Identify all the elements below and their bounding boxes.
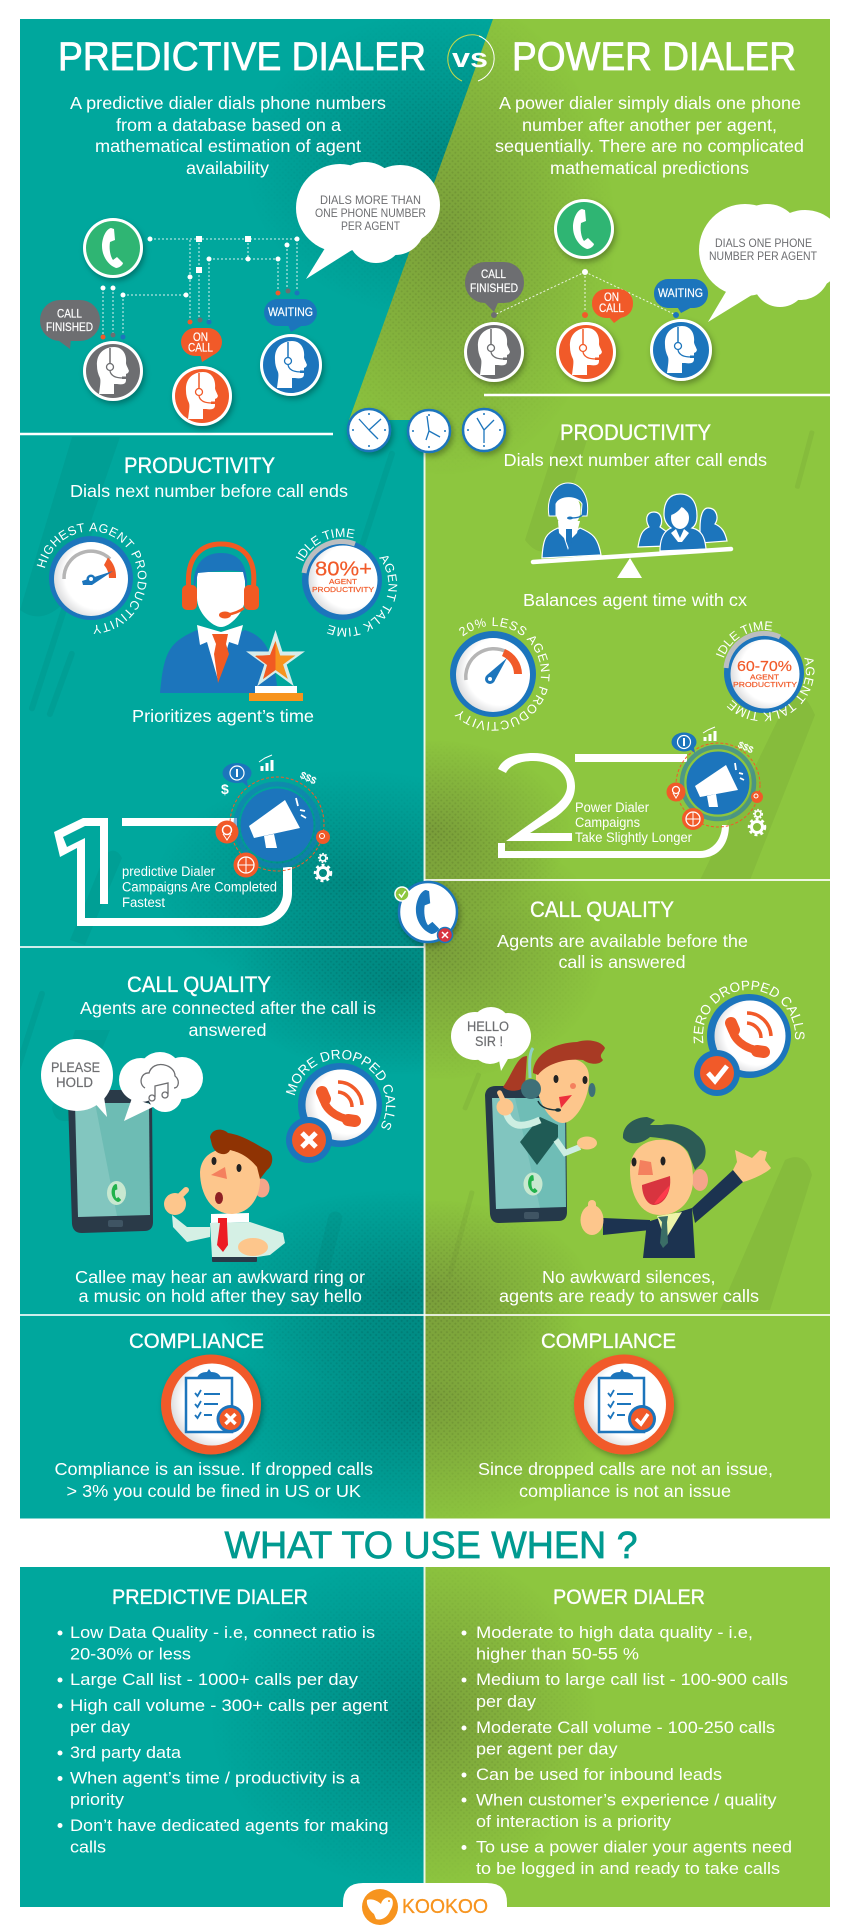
background: teal and green comparison panels (6, 0, 830, 1530)
gauge: idle time 60-70% agent productivity: AGENT TALK TIME (726, 658, 814, 722)
text: predictive dialer definition: from a database based on a (116, 115, 341, 135)
list: predictive dialer use cases: Large Call list - 1000+ calls per day (70, 1670, 359, 1689)
bubble: on call left (181, 328, 222, 362)
text: awkward ring caption: Callee may hear an awkward ring or (75, 1267, 365, 1287)
bubble: please hold: HOLD (56, 1075, 93, 1090)
text: compliance is an issue: Compliance is an issue. If dropped calls (54, 1459, 373, 1479)
text: predictive dialer definition: A predictive dialer dials phone numbers (70, 93, 386, 113)
panel: predictive dialer list (20, 1550, 630, 1907)
gauge: 20% less agent productivity: 20% LESS AGENT PRODUCTIVITY (454, 617, 550, 731)
icon: compliance clipboard with check (574, 1354, 674, 1454)
text: no awkward silences caption: agents are ready to answer calls (499, 1286, 759, 1306)
bubble: on call right: CALL (599, 303, 625, 315)
text: no awkward silences caption (499, 1267, 759, 1306)
bubble: on call left: ON (193, 332, 208, 344)
icon: agent on call right (556, 322, 616, 382)
heading: predictive dialer: PREDICTIVE DIALER (112, 1585, 308, 1609)
text: power dialer definition (495, 93, 804, 178)
icon: balance between agent and customers (533, 483, 731, 578)
bubble: music cloud (119, 1052, 203, 1121)
bubble: call finished left: CALL (57, 308, 83, 320)
illustration: happy man in suit (580, 1117, 771, 1258)
list: predictive dialer use cases: per day (70, 1718, 131, 1736)
illustration: smiling woman agent (496, 1040, 605, 1165)
list: power dialer use cases: Moderate to high data quality - i.e, (476, 1623, 753, 1642)
list: power dialer use cases: higher than 50-55 % (476, 1644, 639, 1664)
gauge: idle time 60-70% agent productivity: IDLE TIME (716, 621, 772, 658)
text: power dialer campaigns: Take Slightly Longer (575, 830, 692, 845)
gauge: idle time 80% agent productivity: AGENT TALK TIME (326, 556, 398, 637)
heading: compliance right: COMPLIANCE (541, 1329, 676, 1353)
list: power dialer use cases: Can be used for inbound leads (476, 1765, 722, 1784)
text: predictive dialer campaigns: Fastest (122, 895, 165, 910)
icon: megaphone badge left: $ (221, 781, 229, 797)
badge: zero dropped calls: ZERO DROPPED CALLS (694, 980, 804, 1044)
gauge: idle time 80% agent productivity: PRODUCTIVITY (312, 585, 374, 594)
bubble: call finished right: FINISHED (470, 283, 518, 295)
bubble: call finished right (465, 262, 524, 312)
list: predictive dialer use cases: 3rd party data (70, 1743, 182, 1762)
icon: green phone left (83, 218, 143, 278)
heading: what to use when: WHAT TO USE WHEN ? (224, 1525, 638, 1567)
icon: megaphone badge left (216, 755, 331, 881)
list: power dialer use cases: to be logged in and ready to take calls (476, 1859, 780, 1878)
callout: dials one phone number: NUMBER PER AGENT (709, 249, 818, 263)
icon: compliance clipboard with cross (161, 1354, 261, 1454)
gauge: idle time 60-70% agent productivity: PRODUCTIVITY (733, 680, 797, 689)
icon: three clocks (348, 409, 505, 452)
heading: productivity right: PRODUCTIVITY (560, 420, 711, 445)
text: predictive dialer definition (70, 93, 386, 178)
icon: megaphone badge right: $$$ (736, 740, 756, 757)
gauge: idle time 80% agent productivity (296, 528, 398, 637)
badge: zero dropped calls (694, 980, 804, 1096)
icon: agent on call (172, 366, 232, 426)
logo: kookoo (343, 1883, 507, 1928)
list: predictive dialer use cases: Low Data Quality - i.e, connect ratio is (70, 1623, 375, 1642)
title: vs badge: vs (452, 43, 488, 73)
list: power dialer use cases: When customer’s experience / quality (476, 1790, 777, 1810)
title: power dialer: POWER DIALER (512, 35, 796, 79)
gauge: idle time 80% agent productivity: 80%+ (315, 559, 372, 581)
bubble: call finished left (40, 300, 100, 349)
text: power dialer definition: mathematical predictions (550, 158, 749, 178)
text: power dialer definition: sequentially. There are no complicated (495, 136, 804, 156)
gauge: idle time 60-70% agent productivity: AGENT (750, 672, 779, 682)
icon: megaphone badge right (666, 727, 765, 835)
icon: agent waiting right (650, 319, 712, 381)
list: predictive dialer use cases: 20-30% or less (70, 1644, 191, 1664)
text: power dialer definition: number after another per agent, (522, 115, 777, 135)
text: predictive dialer campaigns: Campaigns Are Completed (122, 880, 277, 894)
bubble: call finished left: FINISHED (46, 322, 93, 334)
diagram: power dialing network (491, 269, 679, 318)
text: compliance is not an issue (478, 1459, 773, 1501)
bubble: call finished right: CALL (481, 269, 507, 281)
bubble: on call right: ON (604, 292, 619, 304)
text: predictive dialer campaigns (122, 864, 277, 910)
text: compliance is an issue (54, 1459, 373, 1501)
callout: dials more than one phone number: PER AGENT (341, 219, 401, 233)
bubble: on call left: CALL (188, 342, 214, 354)
text: agents are available: Agents are available before the (497, 931, 748, 951)
list: predictive dialer use cases: When agent’s time / productivity is a (70, 1768, 361, 1788)
gauge: highest agent productivity: HIGHEST AGENT PRODUCTIVITY (36, 522, 146, 634)
text: prioritizes agent's time: Prioritizes agent’s time (132, 706, 314, 726)
text: awkward ring caption (75, 1267, 365, 1306)
list: power dialer use cases: per day (476, 1692, 537, 1711)
icon: agent with headset and star trophy (160, 544, 305, 701)
text: agents are connected: answered (188, 1020, 266, 1040)
badge: more dropped calls: MORE DROPPED CALLS (286, 1050, 396, 1130)
callout: dials one phone number (699, 204, 830, 322)
text: compliance is an issue: > 3% you could be fined in US or UK (66, 1481, 361, 1501)
bubble: waiting right (654, 279, 708, 313)
illustration: phone right (485, 1086, 567, 1223)
title: vs badge (448, 35, 494, 81)
heading: call quality left: CALL QUALITY (127, 972, 271, 997)
list: predictive dialer use cases: priority (70, 1790, 125, 1809)
list: power dialer use cases: per agent per day (476, 1740, 618, 1758)
text: predictive dialer campaigns: predictive Dialer (122, 864, 215, 879)
heading: productivity left: PRODUCTIVITY (124, 453, 275, 478)
list: predictive dialer use cases: calls (70, 1838, 106, 1856)
text: power dialer campaigns: Power Dialer (575, 800, 649, 815)
heading: compliance left: COMPLIANCE (129, 1329, 264, 1353)
bubble: on call right (592, 289, 633, 323)
text: awkward ring caption: a music on hold after they say hello (78, 1286, 362, 1306)
list: power dialer use cases (462, 1623, 792, 1878)
icon: green phone right (554, 199, 614, 259)
bubble: waiting right: WAITING (658, 288, 703, 300)
text: power dialer campaigns (575, 800, 692, 845)
callout: dials more than one phone number: ONE PHONE NUMBER (315, 206, 426, 220)
icon: agent waiting (260, 334, 322, 396)
list: predictive dialer use cases: High call volume - 300+ calls per agent (70, 1696, 388, 1715)
number one outline (54, 818, 292, 926)
text: dials next number after call ends: Dials next number after call ends (504, 450, 767, 470)
text: predictive dialer definition: availability (186, 158, 269, 178)
diagram: predictive dialing network (100, 236, 300, 340)
title: predictive dialer: PREDICTIVE DIALER (58, 35, 426, 79)
bubble: hello sir: HELLO (467, 1019, 509, 1034)
bubble: waiting left: WAITING (268, 307, 313, 319)
list: predictive dialer use cases: Don’t have dedicated agents for making (70, 1816, 388, 1835)
icon: central phone badge (395, 882, 457, 942)
icon: agent call finished right (464, 322, 524, 382)
gauge: idle time 80% agent productivity: AGENT (329, 577, 357, 586)
text: power dialer definition: A power dialer simply dials one phone (499, 93, 801, 113)
gauge: highest agent productivity (36, 522, 190, 650)
callout: dials more than one phone number: DIALS MORE THAN (320, 193, 421, 207)
text: agents are available: call is answered (558, 952, 686, 972)
bubble: please hold (41, 1039, 113, 1117)
gauge: idle time 60-70% agent productivity: 60-70% (737, 658, 792, 675)
panel: power dialer list (424, 1567, 830, 1907)
gauge: idle time 60-70% agent productivity (716, 621, 814, 722)
list: power dialer use cases: To use a power dialer your agents need (476, 1838, 792, 1856)
illustration: phone left (68, 1090, 153, 1233)
list: power dialer use cases: Medium to large call list - 100-900 calls (476, 1670, 788, 1689)
text: power dialer campaigns: Campaigns (575, 815, 640, 830)
icon: megaphone badge left: $$$ (298, 770, 318, 787)
number two outline (498, 753, 729, 858)
bubble: hello sir (451, 1007, 531, 1071)
callout: dials one phone number: DIALS ONE PHONE (715, 236, 812, 250)
text: dials next number before call ends: Dials next number before call ends (70, 481, 348, 501)
bubble: waiting left (264, 299, 317, 332)
callout: dials more than one phone number (296, 162, 440, 279)
text: no awkward silences caption: No awkward silences, (542, 1267, 716, 1287)
heading: call quality right: CALL QUALITY (530, 897, 674, 922)
bubble: please hold: PLEASE (51, 1060, 100, 1075)
text: compliance is not an issue: compliance is not an issue (519, 1481, 731, 1501)
text: compliance is not an issue: Since dropped calls are not an issue, (478, 1459, 773, 1479)
icon: agent call finished (83, 341, 143, 401)
logo: kookoo: KOOKOO (402, 1895, 488, 1918)
heading: power dialer: POWER DIALER (553, 1585, 705, 1609)
gauge: idle time 80% agent productivity: IDLE TIME (296, 528, 355, 562)
text: balances agent time with cx: Balances agent time with cx (523, 590, 747, 610)
list: power dialer use cases: Moderate Call volume - 100-250 calls (476, 1718, 775, 1737)
text: agents are connected: Agents are connected after the call is (80, 998, 376, 1018)
text: agents are available (497, 931, 748, 972)
badge: more dropped calls (286, 1050, 396, 1163)
text: agents are connected (80, 998, 376, 1040)
bubble: hello sir: SIR ! (475, 1034, 503, 1049)
list: predictive dialer use cases (58, 1623, 388, 1856)
list: power dialer use cases: of interaction is a priority (476, 1812, 672, 1831)
illustration: confused man (164, 1130, 285, 1262)
text: predictive dialer definition: mathematical estimation of agent (95, 136, 361, 156)
